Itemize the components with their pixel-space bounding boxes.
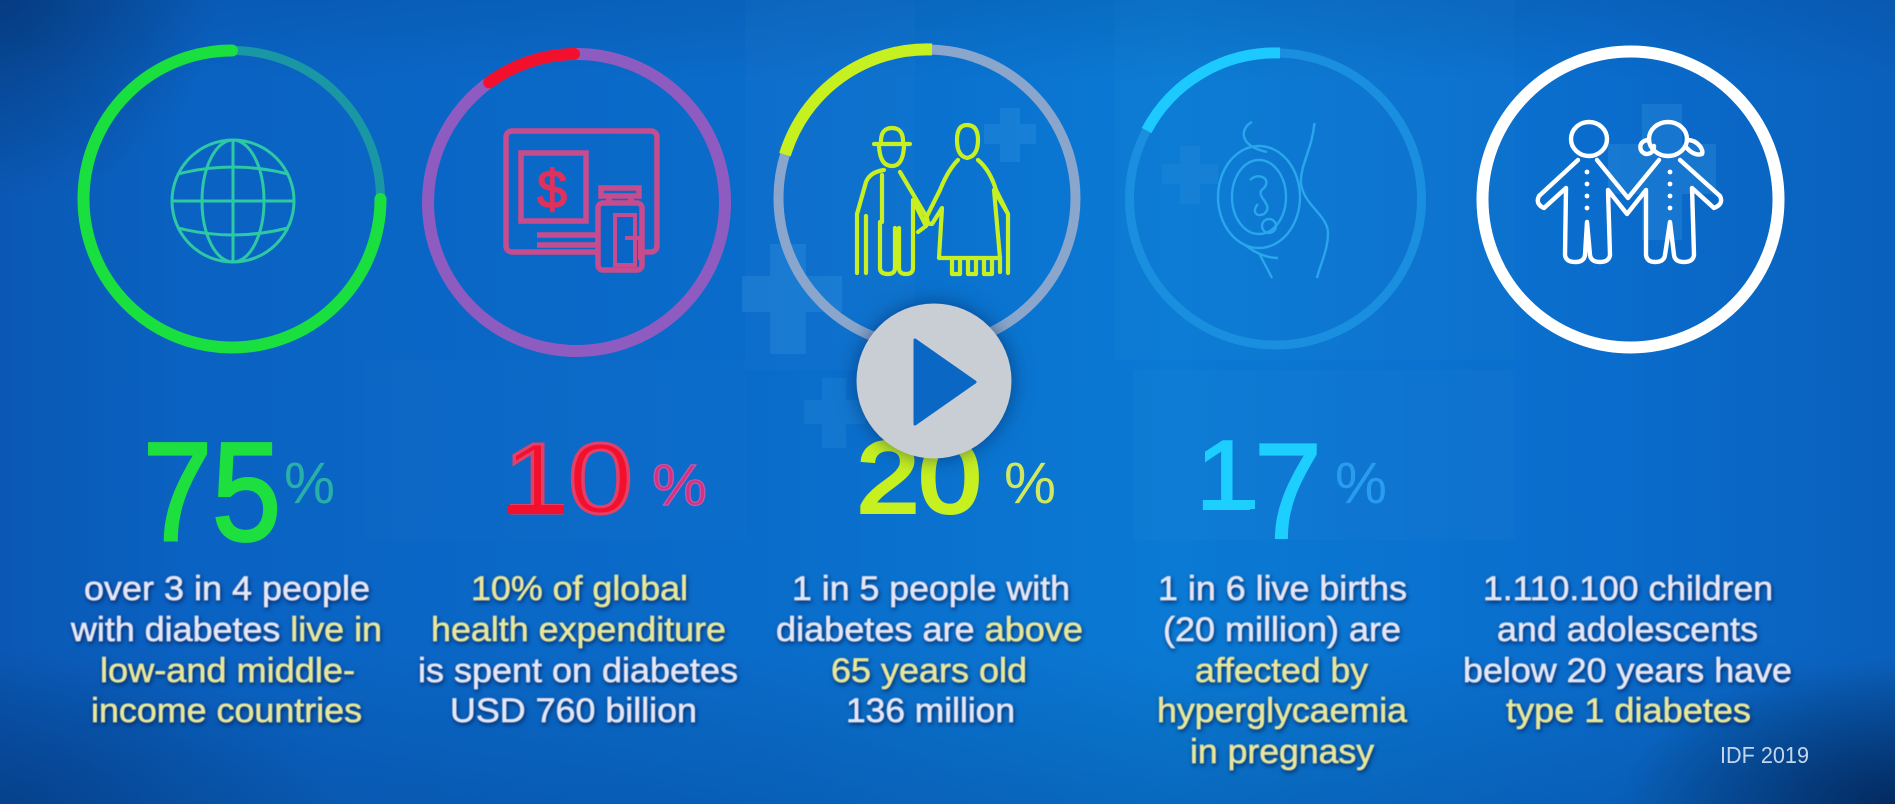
caption: people above 65: 136 million xyxy=(846,692,1015,730)
caption: people above 65: 65 years old xyxy=(831,652,1027,690)
caption: global health expenditure: USD 760 billion xyxy=(450,692,697,730)
caption: hyperglycaemia in pregnancy: hyperglycaemia xyxy=(1157,692,1407,730)
statistic: 20 percent xyxy=(857,422,1056,534)
caption: hyperglycaemia in pregnancy xyxy=(1157,570,1407,771)
icon: money and insulin vial: $ xyxy=(537,160,567,220)
caption: children and adolescents: and adolescents xyxy=(1497,611,1758,649)
caption: global health expenditure: is spent on diabetes xyxy=(418,652,738,690)
ring 4: 17 percent xyxy=(1130,53,1422,345)
caption: children and adolescents xyxy=(1463,570,1792,730)
source note: IDF 2019 xyxy=(1720,742,1809,768)
icon: elderly couple xyxy=(857,125,1008,274)
caption: children and adolescents: type 1 diabetes xyxy=(1506,692,1751,730)
caption: hyperglycaemia in pregnancy: (20 million) are xyxy=(1163,611,1401,649)
icon: two children holding hands xyxy=(1538,122,1721,262)
caption: people above 65 xyxy=(776,570,1083,730)
statistic: 75 percent: 75 xyxy=(143,413,281,570)
caption: children and adolescents: below 20 years have xyxy=(1463,652,1792,690)
caption: low and middle income countries: income countries xyxy=(91,692,362,730)
statistic: 20 percent: % xyxy=(1004,451,1056,516)
caption: low and middle income countries: with diabetes live in xyxy=(70,611,382,649)
caption: low and middle income countries: over 3 in 4 people xyxy=(84,570,370,608)
statistic: 20 percent: 20 xyxy=(857,422,981,534)
caption: people above 65: diabetes are above xyxy=(776,611,1083,649)
ring 5: children xyxy=(1482,52,1778,348)
statistic: 10 percent: 10 xyxy=(503,423,633,535)
caption: hyperglycaemia in pregnancy: in pregnasy xyxy=(1190,733,1374,771)
ring 2: 10 percent xyxy=(428,54,725,351)
caption: global health expenditure xyxy=(418,570,738,730)
caption: global health expenditure: health expenditure xyxy=(431,611,726,649)
statistic: 17 percent: % xyxy=(1335,451,1387,516)
caption: hyperglycaemia in pregnancy: 1 in 6 live births xyxy=(1158,570,1407,608)
caption: children and adolescents: 1.110.100 children xyxy=(1483,570,1773,608)
statistic: 17 percent: 7 xyxy=(1254,415,1322,567)
statistic: 10 percent xyxy=(503,423,707,535)
play button xyxy=(856,304,1012,458)
caption: low and middle income countries: low-and middle- xyxy=(100,652,355,690)
icon: globe xyxy=(172,140,294,262)
ring 3: 20 percent xyxy=(778,49,1076,346)
caption: hyperglycaemia in pregnancy: affected by xyxy=(1195,652,1368,690)
statistic: 10 percent: % xyxy=(652,453,707,518)
icon: money and insulin vial xyxy=(506,131,657,270)
caption: global health expenditure: 10% of global xyxy=(471,570,688,608)
statistic: 17 percent xyxy=(1196,415,1387,567)
statistic: 17 percent: 1 xyxy=(1196,420,1254,530)
caption: low and middle income countries xyxy=(70,570,382,730)
statistic: 75 percent: % xyxy=(284,451,335,516)
caption: people above 65: 1 in 5 people with xyxy=(792,570,1070,608)
ring 1: 75 percent xyxy=(83,50,380,348)
icon: pregnant belly xyxy=(1218,122,1328,278)
